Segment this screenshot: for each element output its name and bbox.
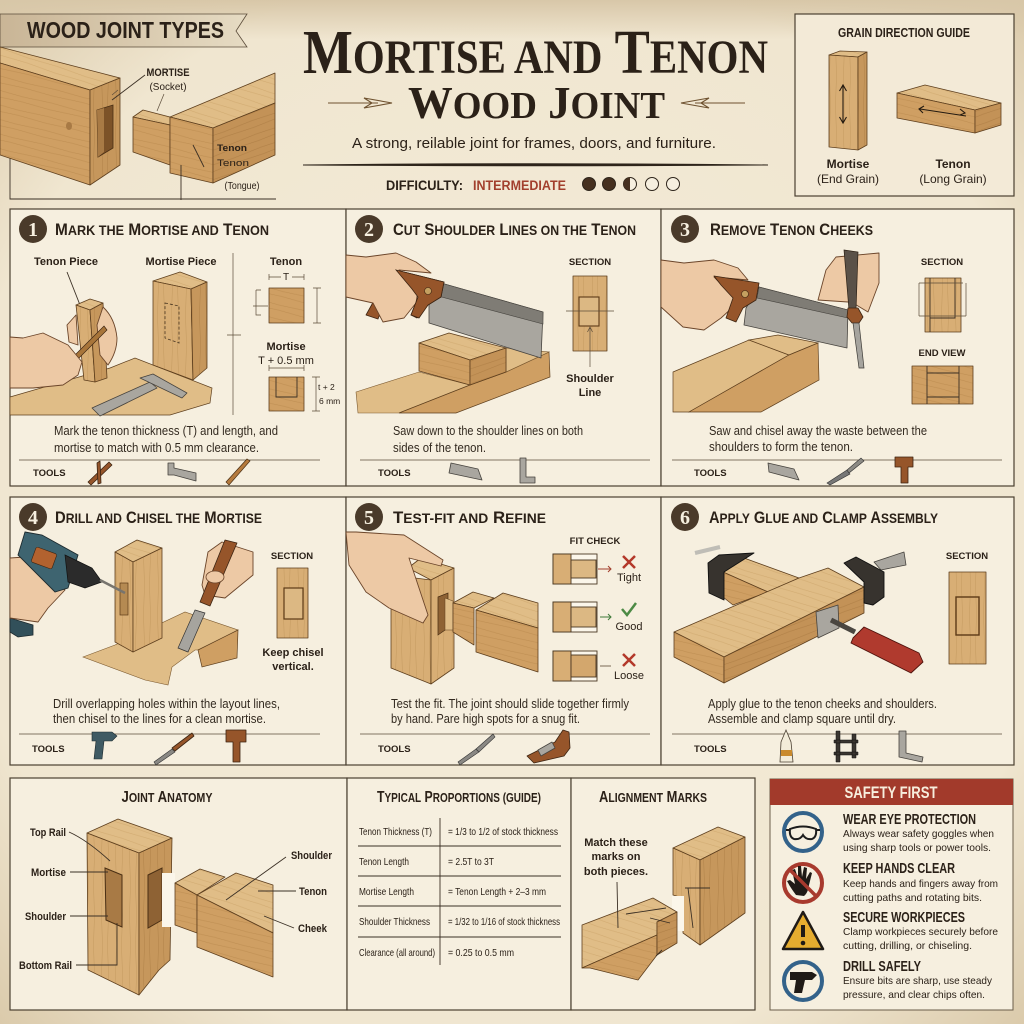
section diagram: shoulder line: SECTION [569,257,611,268]
tools: step 4 [19,730,320,765]
illustration: drilling and chiseling [10,532,253,685]
step number 6: 6 [680,507,690,529]
banner: wood joint types: WOOD JOINT TYPES [27,17,224,43]
panel: grain direction guide [795,14,1014,196]
section diagram: step 6: SECTION [946,551,988,562]
header: safety first: SAFETY FIRST [844,783,938,802]
labels: anatomy callouts: Mortise [31,867,66,879]
dimension diagram: tenon and mortise: T [283,272,289,283]
tools: step 5: TOOLS [378,744,411,755]
instructions: step 3 [709,424,927,454]
step number 4 [19,503,47,531]
table: proportions: Mortise Length [359,886,414,898]
heading: joint anatomy: JOINT ANATOMY [122,789,213,806]
panel: step 1: Tenon Piece [34,256,98,268]
note: match marks [584,837,648,878]
table: proportions: Tenon Thickness (T) [359,826,432,838]
safety item: drill safely: pressure, and clear chips often. [843,989,985,1001]
step number 2 [355,215,383,243]
panel: alignment marks [571,778,755,1010]
step number 2: 2 [364,219,374,241]
header: safety first [770,779,1013,805]
safety item: drill safely [843,958,993,1001]
step number 6 [671,503,699,531]
illustration: sawing shoulder [346,253,550,413]
instructions: step 4 [53,697,280,726]
safety item: hands clear: Keep hands and fingers away from [843,878,998,890]
step number 3: 3 [680,219,690,241]
instructions: step 1: mortise to match with 0.5 mm clearance. [54,441,259,455]
panel: grain direction guide: Tenon [935,157,971,171]
difficulty rating: DIFFICULTY: [386,178,463,193]
tools: step 5 [360,730,650,765]
instructions: step 6: Assemble and clamp square until dry. [708,712,896,726]
difficulty rating: INTERMEDIATE [473,178,566,193]
safety item: eye protection: Always wear safety goggles when [843,828,994,840]
fit check diagram: Loose [614,670,644,682]
tools: step 2: TOOLS [378,468,411,479]
labels: anatomy callouts: Top Rail [30,827,66,839]
panel: step 1 [10,209,346,486]
tools: step 3: TOOLS [694,468,727,479]
instructions: step 3: shoulders to form the tenon. [709,440,853,454]
table: proportions [358,818,561,965]
instructions: step 3: Saw and chisel away the waste between the [709,424,927,438]
tools: step 6 [672,730,1002,762]
table: proportions: Clearance (all around) [359,947,435,959]
step number 5: 5 [364,507,374,529]
fit check diagram [553,536,644,682]
icon: safety goggles [784,813,822,851]
heading: step 3: REMOVE TENON CHEEKS [710,220,873,239]
illustration: long grain block [897,85,1001,133]
note: match marks: both pieces. [584,866,648,878]
instructions: step 6: Apply glue to the tenon cheeks and shoulders. [708,697,937,711]
panel: step 1: Mortise Piece [146,256,216,268]
panel: grain direction guide: Mortise [827,157,870,171]
safety item: drill safely: Ensure bits are sharp, use steady [843,975,993,987]
instructions: step 5 [391,697,630,726]
illustration: glue and clamp [674,547,923,683]
panel: grain direction guide: (Long Grain) [919,172,987,186]
safety item: eye protection [843,811,994,854]
tools: step 6: TOOLS [694,744,727,755]
dimension diagram: tenon and mortise [253,256,340,411]
illustration: aligned pieces [582,827,745,980]
table: proportions: = Tenon Length + 2–3 mm [448,886,546,898]
panel: step 2 [346,209,661,486]
illustration: joint exploded [87,819,273,995]
heading: step 2: CUT SHOULDER LINES ON THE TENON [393,220,636,239]
safety item: eye protection: WEAR EYE PROTECTION [843,811,976,828]
safety item: drill safely: DRILL SAFELY [843,958,921,975]
dimension diagram: tenon and mortise: T + 0.5 mm [258,355,314,367]
panel: grain direction guide: GRAIN DIRECTION GUIDE [838,25,970,40]
table: proportions: = 2.5T to 3T [448,856,494,868]
illustration: test fit [346,532,538,684]
labels: anatomy callouts [19,827,333,972]
callout: tenon [217,143,260,192]
note: match marks: marks on [592,851,641,863]
panel: step 3 [661,209,1014,486]
panel: wood joint types [0,14,276,200]
section and end view diagrams: END VIEW [919,348,966,359]
illustration: mortise beam [0,47,120,185]
callout: mortise [112,67,190,111]
table: proportions: Shoulder Thickness [359,916,430,928]
step number 3 [671,215,699,243]
instructions: step 2 [393,424,583,455]
table: proportions: = 1/3 to 1/2 of stock thickness [448,826,558,838]
heading: step 6: APPLY GLUE AND CLAMP ASSEMBLY [709,508,939,527]
illustration: removing cheeks [661,250,879,412]
section diagram: keep chisel vertical [262,551,324,673]
heading: step 5: TEST-FIT AND REFINE [393,508,546,527]
safety item: secure workpieces: SECURE WORKPIECES [843,909,965,926]
table: proportions: = 1/32 to 1/16 of stock thickness [448,916,560,928]
section diagram: shoulder line: Shoulder [566,373,615,385]
illustration: marking on the wood [10,272,212,416]
callout: tenon: Tenon [217,143,247,153]
title [303,19,768,128]
callout: tenon: Tenon [217,158,249,168]
instructions: step 1 [54,424,278,455]
heading: typical proportions: TYPICAL PROPORTIONS (GUIDE) [377,789,541,806]
icon: drill [784,962,822,1000]
safety item: secure workpieces: Clamp workpieces securely before [843,926,998,938]
step number 4: 4 [28,507,38,529]
illustration: upright end grain block [829,51,867,150]
heading: step 4: DRILL AND CHISEL THE MORTISE [55,508,262,527]
heading: alignment marks: ALIGNMENT MARKS [599,789,707,806]
section diagram: shoulder line [566,257,615,399]
safety item: hands clear [843,860,998,904]
step number 1: 1 [28,219,38,241]
illustration: tenon beam [133,73,275,200]
safety item: hands clear: cutting paths and rotating bits. [843,892,982,904]
table: proportions: = 0.25 to 0.5 mm [448,947,514,959]
section diagram: keep chisel vertical: SECTION [271,551,313,562]
icon: warning triangle [783,912,823,949]
labels: anatomy callouts: Cheek [298,923,328,935]
instructions: step 2: sides of the tenon. [393,441,486,455]
labels: anatomy callouts: Shoulder [291,850,333,862]
fit check diagram: Good [616,621,642,633]
safety item: secure workpieces: cutting, drilling, or chiseling. [843,940,972,952]
fit check diagram: FIT CHECK [570,536,620,547]
tools: step 3 [672,457,1002,485]
tools: step 4: TOOLS [32,744,65,755]
panel: typical proportions [347,778,571,1010]
safety item: hands clear: KEEP HANDS CLEAR [843,860,955,877]
step number 1 [19,215,47,243]
panel: joint anatomy [10,778,347,1010]
title: MORTISE AND TENON [303,19,768,87]
callout: mortise: (Socket) [150,81,186,93]
tools: step 1 [19,459,320,485]
tools: step 1: TOOLS [33,468,66,479]
difficulty rating [386,178,680,193]
panel: grain direction guide: (End Grain) [817,172,879,186]
banner: wood joint types [0,14,247,47]
note: match marks: Match these [584,837,648,849]
instructions: step 6 [708,697,937,726]
section diagram: shoulder line: Line [579,387,601,399]
callout: tenon: (Tongue) [224,181,260,192]
instructions: step 1: Mark the tenon thickness (T) and length, and [54,424,278,438]
section and end view diagrams [912,257,973,404]
callout: mortise: MORTISE [146,67,190,79]
labels: anatomy callouts: Tenon [299,886,327,898]
dimension diagram: tenon and mortise: Tenon [270,256,302,268]
instructions: step 4: then chisel to the lines for a clean mortise. [53,712,266,726]
panel: safety first [770,779,1013,1010]
section diagram: step 6 [946,551,988,664]
dimension diagram: tenon and mortise: t + 2 [318,382,335,392]
panel: step 5 [346,497,661,765]
fit check diagram: Tight [617,572,641,584]
section diagram: keep chisel vertical: Keep chisel [262,647,324,659]
section and end view diagrams: SECTION [921,257,963,268]
icon: no hands [784,864,822,902]
tagline: A strong, reilable joint for frames, doors, and furniture. [352,135,716,152]
safety item: secure workpieces [843,909,998,952]
panel: step 6 [661,497,1014,765]
table: proportions: Tenon Length [359,856,409,868]
labels: anatomy callouts: Bottom Rail [19,960,72,972]
section diagram: keep chisel vertical: vertical. [272,661,314,673]
tools: step 2 [360,458,650,483]
instructions: step 5: by hand. Pare high spots for a snug fit. [391,712,580,726]
instructions: step 2: Saw down to the shoulder lines on both [393,424,583,438]
instructions: step 5: Test the fit. The joint should slide together firmly [391,697,630,711]
instructions: step 4: Drill overlapping holes within the layout lines, [53,697,280,711]
step number 5 [355,503,383,531]
panel: step 4 [10,497,346,765]
safety item: eye protection: using sharp tools or power tools. [843,842,991,854]
heading: step 1: MARK THE MORTISE AND TENON [55,220,269,239]
subtitle: wood joint: WOOD JOINT [408,77,665,128]
dimension diagram: tenon and mortise: Mortise [266,341,306,353]
labels: anatomy callouts: Shoulder [25,911,67,923]
dimension diagram: tenon and mortise: 6 mm [319,396,340,406]
